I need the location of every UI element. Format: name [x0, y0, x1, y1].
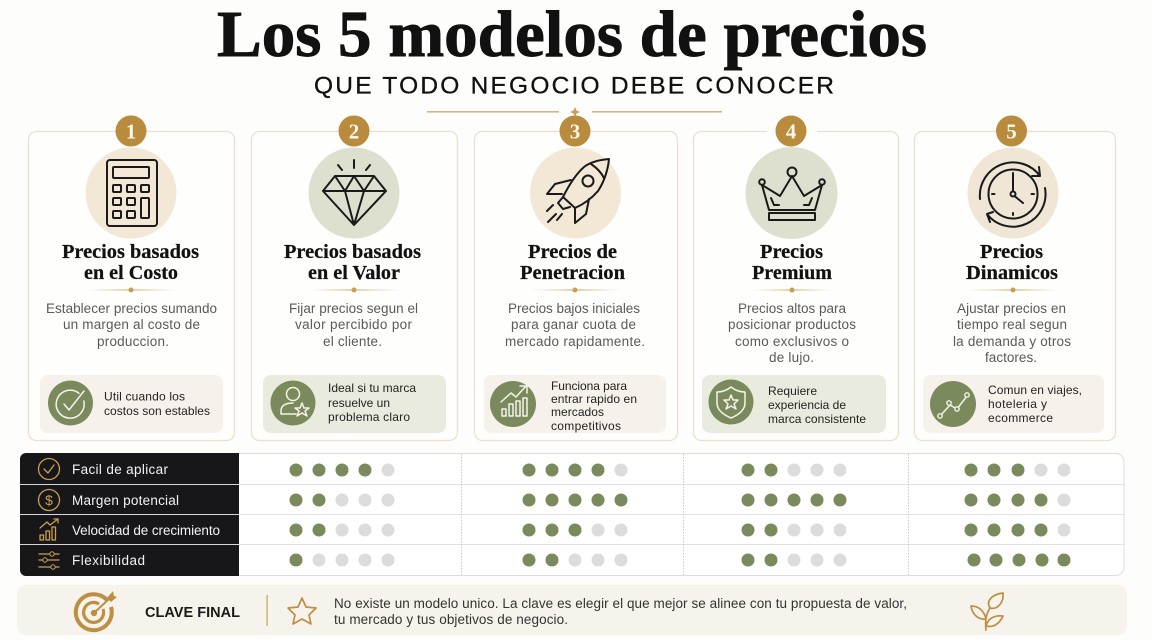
title: Los 5 modelos de precios — [217, 0, 927, 71]
heading: en el Costo — [84, 262, 178, 284]
description: Precios altos para — [738, 301, 846, 316]
heading: Dinamicos — [966, 262, 1058, 284]
description: Establecer precios sumando — [46, 301, 217, 316]
description — [505, 301, 645, 349]
description: Fijar precios segun el — [289, 301, 418, 316]
icon: growth bars — [501, 386, 527, 416]
heading — [966, 241, 1058, 284]
icon: user star — [281, 388, 309, 416]
row: Velocidad de crecimiento — [40, 519, 220, 540]
icon: check — [56, 390, 84, 418]
callout: costos son estables — [104, 404, 210, 418]
description — [953, 301, 1071, 365]
row: Margen potencial: $ — [45, 492, 53, 508]
icon: clock cycle — [968, 148, 1058, 238]
panel: Precios basados en el Valor — [252, 116, 458, 440]
callout: mercados — [551, 405, 604, 419]
description: para ganar cuota de — [511, 317, 636, 332]
description: un margen al costo de — [63, 317, 200, 332]
row: Velocidad de crecimiento: Velocidad de crecimiento — [72, 523, 220, 538]
heading: en el Valor — [308, 262, 400, 284]
icon: calculator — [86, 148, 176, 238]
heading: Penetracion — [520, 262, 626, 284]
callout — [40, 375, 223, 433]
callout: hoteleria y — [988, 397, 1047, 411]
callout: marca consistente — [768, 412, 866, 426]
icon: diamond — [308, 148, 400, 238]
title ornament — [427, 107, 722, 117]
callout — [923, 375, 1104, 433]
callout: entrar rapido en — [551, 392, 637, 406]
panel: clave final — [17, 585, 1127, 635]
icon: sprout — [971, 593, 1003, 630]
row: Margen potencial — [38, 490, 179, 510]
callout: Comun en viajes, — [988, 383, 1082, 397]
panel: Precios basados en el Costo — [28, 116, 234, 440]
row: Margen potencial: Margen potencial — [72, 493, 179, 508]
callout: Requiere — [768, 384, 817, 398]
row: Facil de aplicar: Facil de aplicar — [72, 462, 168, 477]
callout — [484, 375, 666, 433]
description: el cliente. — [323, 334, 382, 349]
number badge 1 — [116, 116, 146, 146]
callout — [263, 375, 446, 433]
description — [46, 301, 217, 349]
description: Ajustar precios en — [957, 301, 1066, 316]
row: Flexibilidad: Flexibilidad — [72, 553, 145, 568]
callout: Util cuando los — [104, 390, 185, 404]
panel: Precios de Penetracion — [474, 116, 678, 440]
description: valor percibido por — [295, 317, 412, 332]
callout: experiencia de — [768, 398, 846, 412]
comparison table — [20, 453, 1124, 576]
row: Flexibilidad — [39, 552, 145, 569]
number badge 4 — [776, 116, 806, 146]
number badge 3: 3 — [570, 120, 580, 144]
number badge 4: 4 — [786, 120, 797, 144]
number badge 5: 5 — [1006, 120, 1017, 144]
subtitle: QUE TODO NEGOCIO DEBE CONOCER — [314, 72, 834, 100]
description: tiempo real segun — [957, 317, 1067, 332]
description: posicionar productos — [728, 317, 856, 332]
description: la demanda y otros — [953, 334, 1071, 349]
heading — [752, 241, 832, 284]
icon: line graph — [938, 393, 969, 418]
label: CLAVE FINAL — [145, 605, 240, 621]
panel: Precios Premium — [694, 116, 898, 440]
heading: Precios — [980, 241, 1043, 263]
number badge 5 — [996, 116, 1027, 146]
number badge 1: 1 — [126, 120, 136, 144]
icon: shield star — [717, 387, 745, 418]
description: Precios bajos iniciales — [508, 301, 640, 316]
heading: Precios — [760, 241, 823, 263]
description — [728, 301, 856, 365]
callout: Ideal si tu marca — [328, 381, 416, 395]
description: de lujo. — [769, 350, 814, 365]
row labels panel — [20, 453, 239, 576]
number badge 3 — [560, 116, 590, 146]
description: factores. — [985, 350, 1037, 365]
rating dots: column 1 — [290, 464, 394, 566]
callout: competitivos — [551, 419, 621, 433]
rating dots: column 3 — [742, 464, 846, 566]
callout: resuelve un — [328, 396, 390, 410]
icon: rocket — [530, 148, 621, 238]
heading — [62, 241, 199, 284]
closing text — [334, 596, 907, 627]
heading — [520, 241, 626, 284]
icon: star — [288, 598, 316, 624]
description: mercado rapidamente. — [505, 334, 645, 349]
heading: Precios basados — [284, 241, 421, 263]
callout: ecommerce — [988, 411, 1053, 425]
heading: Premium — [752, 262, 832, 284]
rating dots: column 4 — [964, 464, 1070, 566]
callout: Funciona para — [551, 379, 627, 393]
panel: Precios Dinamicos — [914, 116, 1116, 440]
row: Facil de aplicar — [38, 458, 168, 480]
icon: target — [76, 591, 117, 630]
closing text: tu mercado y tus objetivos de negocio. — [334, 612, 568, 627]
closing text: No existe un modelo unico. La clave es elegir el que mejor se alinee con tu propuesta de valor, — [334, 596, 907, 611]
heading: Precios de — [528, 241, 617, 263]
number badge 2: 2 — [349, 120, 359, 144]
rating dots: column 2 — [522, 464, 628, 566]
description: como exclusivos o — [735, 334, 849, 349]
description: produccion. — [97, 334, 169, 349]
callout: problema claro — [328, 410, 410, 424]
heading — [284, 241, 421, 284]
callout — [702, 375, 886, 433]
icon: crown — [746, 147, 838, 239]
description — [289, 301, 418, 349]
heading: Precios basados — [62, 241, 199, 263]
number badge 2 — [338, 116, 370, 146]
